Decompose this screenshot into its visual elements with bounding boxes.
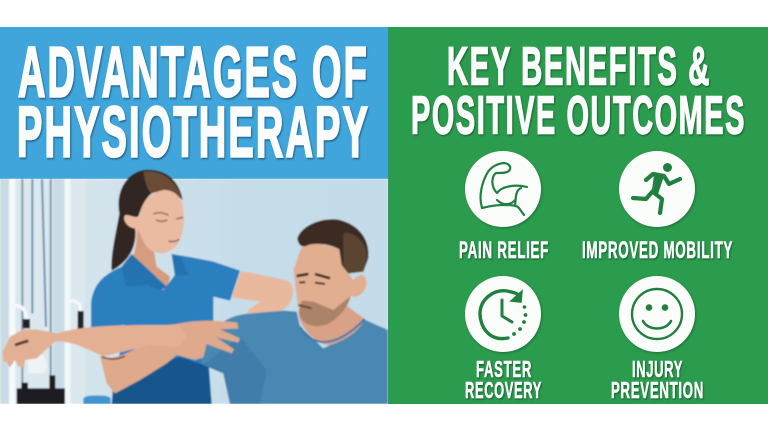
panel: title banner — [0, 27, 388, 179]
man: hair — [297, 219, 368, 273]
benefit: pain relief — [459, 151, 549, 264]
woman: hair and ponytail — [111, 170, 183, 271]
label: faster recovery — [465, 356, 542, 403]
label: injury prevention: PREVENTION — [611, 377, 704, 403]
icon: clock with arrow — [465, 276, 541, 352]
benefit: faster recovery — [465, 276, 542, 403]
label: faster recovery: RECOVERY — [465, 377, 542, 403]
woman: polo shirt — [91, 254, 240, 404]
panel: physiotherapy photo — [0, 170, 388, 404]
man: t-shirt — [199, 311, 388, 404]
woman: extended forearm and hand — [100, 321, 240, 393]
heading: advantages of physiotherapy: PHYSIOTHERAPY — [17, 94, 370, 172]
woman: face and neck — [122, 189, 184, 254]
woman: right arm on shoulder — [231, 270, 294, 314]
label: faster recovery: FASTER — [476, 356, 532, 382]
label: injury prevention: INJURY — [632, 356, 683, 382]
heading: advantages of physiotherapy: ADVANTAGES OF — [18, 34, 369, 112]
label: injury prevention — [611, 356, 704, 403]
icon: smiley face — [619, 276, 695, 352]
icon: running person — [619, 151, 695, 227]
man: face — [292, 242, 368, 310]
panel: key benefits — [388, 27, 768, 404]
label: pain relief: PAIN RELIEF — [459, 237, 549, 264]
benefit: improved mobility — [582, 151, 733, 264]
heading: advantages of physiotherapy — [17, 34, 370, 172]
benefit: injury prevention — [611, 276, 704, 403]
heading: key benefits and positive outcomes — [411, 36, 746, 146]
cables — [22, 179, 51, 383]
icon: flexed muscle — [465, 151, 541, 227]
